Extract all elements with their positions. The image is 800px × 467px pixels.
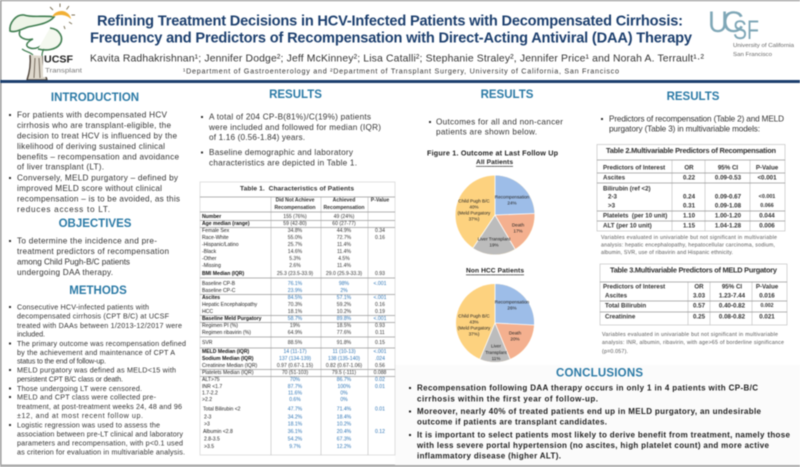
table 1: 49 (24%) (334, 214, 355, 220)
table 1: Did Not Achieve (276, 198, 315, 204)
chart: non HCC patients pie: 20% (510, 336, 520, 342)
table 1: 89.8% (337, 316, 352, 322)
heading: results: RESULTS (269, 89, 322, 101)
text block: cohort summary (201, 112, 381, 168)
logo: UCSF Transplant: UCSF (44, 54, 74, 66)
text block: methods: by the achievement and maintenance of CPT A (17, 348, 175, 357)
table 2: 0.09-1.08 (715, 202, 742, 210)
title: Frequency and Predictors of Recompensation with Direct-Acting Antiviral (DAA) Therapy (90, 30, 693, 46)
text block: methods: status to the end of follow-up. (17, 356, 106, 366)
text block: methods: Consecutive HCV-infected patients with (17, 302, 149, 312)
table 1: 5.3% (289, 256, 301, 262)
table 2: Ascites (603, 174, 626, 182)
text block: introduction: Conversely, MELD purgatory – defined by (17, 174, 179, 182)
table 2: ALT (per 10 unit) (603, 222, 652, 230)
table 3: 0.40-0.82 (719, 302, 746, 310)
table 3: OR (694, 284, 704, 290)
table 3: 0.25 (693, 314, 706, 320)
table 1: 34.2% (288, 414, 303, 420)
table 1: 55.0% (288, 235, 303, 241)
table 1: 59 (42-80) (283, 221, 307, 227)
table 1: 70 (51-103) (282, 370, 308, 376)
table 1: SVR (202, 340, 213, 346)
table 1: 18.5% (337, 323, 352, 329)
table 2: 0.09-0.67 (715, 194, 742, 200)
table 1: 155 (76%) (283, 214, 307, 220)
table 1: 72.7% (337, 235, 352, 241)
table 1: Number (202, 214, 221, 220)
table 1: -Black (202, 249, 217, 255)
table 1: 0.16 (375, 235, 385, 241)
authors: Kavita Radhakrishnan¹; Jennifer Dodge²; Jeff McKinney²; Lisa Catalli²; Stephanie Straley², Jennifer Price¹ and Norah A. Terrault¹·² (90, 54, 705, 64)
table 3: 0.08-0.82 (719, 314, 746, 320)
text block: cohort summary: A total of 204 CP-B(81%)/C(19%) patients (209, 112, 371, 122)
table 1: 2.8-3.5 (204, 436, 220, 442)
table 1: 84.5% (288, 295, 303, 301)
table 1: 14 (11-17) (283, 349, 307, 355)
text block: introduction: reduces access to LT. (17, 205, 110, 214)
table 1: <.001 (374, 295, 387, 301)
table 1: <.001 (374, 281, 387, 287)
chart: non HCC patients pie (456, 284, 534, 362)
table 1: 36.1% (288, 429, 303, 435)
table 1: 0.6% (289, 397, 301, 403)
table 1: 0% (340, 397, 348, 403)
text block: conclusions (409, 384, 791, 460)
table 3: Total Bilirubin (605, 302, 646, 310)
text block: methods: ±12, and at most recent follow up. (17, 411, 143, 420)
logo: UCSF: University of California (733, 43, 795, 49)
chart: all patients pie: 24% (507, 200, 517, 206)
logo: UCSF: U (708, 6, 728, 39)
chart: non HCC patients pie: Recompensation (495, 300, 530, 304)
table 2: 0.044 (759, 212, 775, 220)
table 1: 71.4% (337, 406, 352, 412)
table 1: 11 (10-13) (332, 349, 356, 355)
table 1: 0.16 (375, 302, 385, 308)
table 2: P-Value (756, 164, 779, 172)
table 1: 0.93 (375, 271, 385, 277)
table 2: 0.09-0.53 (715, 174, 742, 182)
text block: methods: persistent CPT B/C class or death. (17, 374, 123, 384)
text block: methods: MELD and CPT class were collected pre- (17, 392, 157, 402)
table 3: 3.03 (693, 292, 706, 300)
text block: introduction: improved MELD score without clinical (17, 184, 162, 193)
table 2: 1.00-1.20 (715, 212, 742, 220)
text block: methods: The primary outcome was recompensation defined (17, 339, 186, 348)
figure title: Figure 1. Outcome at Last Follow Up (427, 148, 559, 158)
note: table 2: Variables evaluated in univariable but not significant in multivariable (601, 235, 777, 241)
heading: results: RESULTS (481, 89, 534, 101)
table 1: 0.56 (375, 363, 385, 369)
table 1: 54.2% (288, 436, 303, 442)
table 3: 0.57 (693, 302, 706, 310)
table 1: 67.3% (337, 436, 352, 442)
table 1: 2-3 (204, 414, 212, 420)
note: table 2 (601, 235, 777, 256)
chart: non HCC patients pie: Transplant (485, 350, 507, 355)
table 2: <0.001 (759, 194, 775, 200)
table 2: Predictors of Interest (603, 164, 665, 172)
text block: conclusions: inflammatory disease (higher ALT). (417, 452, 561, 460)
heading: conclusions: CONCLUSIONS (556, 368, 643, 380)
text block: introduction: benefits – recompensation and avoidance (17, 152, 179, 162)
table 2: Table 2.Multivariable Predictors of Recompensation (606, 146, 776, 155)
table 1: 138 (135-140) (328, 356, 360, 362)
text block: cohort summary: Baseline demographic and laboratory (209, 148, 354, 157)
chart: all patients pie (456, 176, 534, 255)
note: table 3: (p=0.057). (602, 349, 628, 355)
table 1: .024 (375, 356, 385, 362)
table 1: 10.2% (337, 422, 352, 428)
table 1: <.001 (374, 349, 387, 355)
table 1: Age median (range) (202, 221, 250, 227)
table 1: 11.4% (337, 249, 351, 255)
table 1: Recompensation (323, 205, 365, 211)
text block: methods: as criterion for evaluation in multivariable analysis. (17, 448, 185, 456)
table 1: Baseline CP-C (202, 288, 236, 294)
chart: non HCC patients pie: Child Pugh B/C (458, 314, 490, 318)
panel: results column 2 (200, 89, 395, 455)
heading: objectives: OBJECTIVES (59, 218, 132, 230)
chart: all patients pie: 40% (469, 204, 479, 210)
text block: introduction: cirrhosis who are transplant-eligible, the (17, 121, 171, 130)
chart: all patients pie: (Meld Purgatory (458, 210, 491, 216)
table 1: HCC (202, 309, 213, 315)
figure title (427, 148, 559, 166)
table 2: Bilirubin (ref <2) (603, 186, 651, 192)
table 3: Ascites (605, 292, 628, 300)
text block: cohort summary: of 1.16 (0.56-1.84) years. (209, 133, 305, 142)
text block: introduction: recompensation – is to be avoided, as this (17, 194, 180, 204)
note: table 2: albumin, SVR, use of ribavirin and Hispanic ethnicity. (601, 250, 733, 256)
table 2: >3 (608, 202, 616, 210)
table 1: Recompensation (274, 205, 316, 211)
table 1: 23.9% (288, 288, 303, 294)
table 2: 95% CI (718, 164, 738, 172)
table 1: 98% (339, 281, 350, 287)
text block: methods: treated with DAAs between 1/2013-12/2017 were (17, 321, 182, 330)
table 1: 18.1% (288, 422, 303, 428)
text block: introduction: of liver transplant (LT). (17, 162, 104, 172)
table 3: Table 3.Multivariable Predictors of MELD Purgatory (610, 266, 778, 274)
text block: methods: Logistic regression was used to assess the (17, 420, 160, 430)
table 2: 1.10 (683, 212, 696, 220)
table 3: Predictors of Interest (603, 284, 665, 290)
table 1: Baseline Meld Purgatory (202, 316, 262, 322)
table 1: 25.7% (288, 242, 303, 248)
text block: outcomes (429, 118, 563, 136)
table 2: OR (684, 164, 694, 172)
text block: objectives: To determine the incidence and pre- (17, 236, 157, 246)
table 3: Creatinine (605, 314, 636, 320)
table 2: 0.22 (683, 174, 696, 182)
table 1: 79.5 (-111) (332, 370, 356, 376)
table 1: 76.1% (288, 281, 303, 287)
table 1: Total Bilirubin <2 (203, 406, 241, 412)
text block: conclusions: with less severe portal hypertension (no ascites, high platelet count) and more active (416, 441, 770, 450)
table 1: 11.4% (337, 263, 351, 269)
text block: objectives: treatment predictors of recompensation (17, 247, 169, 256)
chart: all patients pie: 37%) (469, 216, 480, 222)
note: table 3: Variables evaluated in univariable but not significant in multivariable (602, 332, 778, 338)
logo: UCSF: F (747, 15, 759, 45)
table 1: 64.9% (288, 330, 303, 336)
table 1: Creatinine Median (IQR) (202, 363, 258, 369)
table 1: 91.8% (337, 340, 352, 346)
table 1: 0.01 (375, 384, 385, 390)
affiliations: ¹Department of Gastroenterology and ²Department of Transplant Surgery, University of California, San Francisco (183, 66, 619, 76)
table 2: <0.001 (757, 174, 777, 182)
table 1: Race-White (202, 235, 229, 241)
text block: methods: MELD purgatory was defined as MELD<15 with (17, 366, 176, 374)
table 1: >3.5 (204, 444, 214, 450)
table 1: 70% (290, 377, 301, 383)
heading: results: RESULTS (667, 91, 720, 103)
chart: non HCC patients pie: 37%) (469, 332, 480, 336)
table 2: 2-3 (608, 194, 618, 200)
table 1: INR <1.7 (202, 384, 222, 390)
table 1: 60 (27-77) (332, 221, 356, 227)
chart: non HCC patients pie: (Meld Purgatory (458, 326, 491, 330)
chart: non HCC patients pie: 26% (507, 306, 517, 310)
table 1: 2% (340, 288, 348, 294)
table 1: 0.11 (375, 330, 385, 336)
text block: outcomes: Outcomes for all and non-cancer (436, 118, 563, 126)
panel: left column (9, 92, 186, 456)
table 1: >2.2 (202, 397, 212, 403)
chart: all patients pie: Recompensation (495, 194, 530, 200)
table 1: 9.7% (289, 444, 301, 450)
text block: introduction: decision to treat HCV is influenced by the (17, 132, 177, 140)
note: table 3 (602, 332, 784, 355)
table 1: Female Sex (202, 228, 230, 234)
panel: conclusions (409, 368, 791, 460)
title (90, 14, 693, 46)
table 1: 19% (290, 323, 301, 329)
text block: methods: parameters and recompensation, with p<0.1 used (17, 438, 183, 448)
table 3: 95% CI (722, 284, 742, 290)
title: Refining Treatment Decisions in HCV-Infected Patients with Decompensated Cirrhosis: (97, 14, 683, 30)
table 1: ALT>75 (202, 377, 220, 383)
heading: methods: METHODS (69, 285, 127, 297)
text block: methods: decompensated cirrhosis (CPT B/C) at UCSF (17, 312, 170, 320)
logo: UCSF Transplant (10, 4, 82, 80)
table 1: 11.6% (288, 390, 302, 396)
text block: introduction: likelihood of deriving sustained clinical (17, 142, 165, 151)
table 2: 1.04-1.28 (715, 222, 742, 230)
table 1: 57.1% (337, 295, 352, 301)
text block: objectives (9, 236, 169, 277)
table 1: Regimen PI (%) (202, 323, 238, 329)
table 3: 0.016 (759, 292, 775, 300)
note: table 2: analysis: hepatic encephalopathy, hepatocellular carcinoma, sodium, (601, 242, 775, 248)
table 1: 47.7% (288, 406, 303, 412)
table 1: 1.7-2.2 (202, 390, 218, 396)
table 2: Platelets (per 10 unit) (603, 212, 667, 220)
table 1: 137 (134-139) (279, 356, 311, 362)
panel: results column 4 (597, 91, 787, 355)
table 1: 0.01 (375, 406, 385, 412)
text block: methods: Those undergoing LT were censored. (17, 384, 142, 393)
text block: introduction (9, 110, 180, 214)
text block: objectives: undergoing DAA therapy. (17, 268, 113, 277)
text block: cohort summary: were included and followed for median (IQR) (208, 123, 381, 132)
table 1: 4.5% (338, 256, 350, 262)
table 2: 0.066 (760, 203, 774, 209)
table 1: 0.15 (375, 340, 385, 346)
table 3: 0.002 (761, 303, 774, 309)
table 1: Platelets Median (IQR) (202, 370, 254, 376)
table 1: 12.2% (337, 444, 352, 450)
chart: all patients pie: 19% (489, 242, 499, 248)
text block: conclusions: outcome if patients are transplant candidates. (417, 418, 607, 426)
table 3: 0.021 (759, 314, 775, 320)
text block: conclusions: Moreover, nearly 40% of treated patients end up in MELD purgatory, an undesirable (417, 407, 762, 416)
table 2 (597, 144, 785, 231)
table 1: 70.3% (288, 302, 303, 308)
table 1: Baseline CP-B (202, 281, 236, 287)
table 1: 25.3 (23.5-33.9) (277, 271, 313, 277)
table 1: 2.6% (289, 263, 301, 269)
chart: non HCC patients pie: Liver (491, 344, 501, 348)
table 1: P-Value (371, 198, 389, 204)
table 1: Regimen ribavirin (%) (202, 330, 251, 336)
table 1: 0.02 (375, 377, 385, 383)
text block: methods (9, 302, 186, 456)
text block: introduction: For patients with decompensated HCV (17, 110, 168, 120)
chart: all patients pie: 17% (513, 228, 523, 234)
table 1: 100% (337, 384, 351, 390)
text block: predictors: purgatory (Table 3) in multivariable models: (609, 124, 760, 134)
table 1: 0.34 (375, 228, 385, 234)
text block: conclusions: Recompensation following DAA therapy occurs in only 1 in 4 patients with CP-B/C (417, 384, 758, 392)
chart: non HCC patients pie: Death (509, 330, 522, 336)
table 1: 0.088 (374, 370, 387, 376)
text block: conclusions: cirrhosis within the first year of follow-up. (417, 394, 598, 404)
header divider (0, 80, 800, 83)
table 1: MELD Median (IQR) (202, 349, 250, 355)
table 3: 1.23-7.44 (719, 292, 746, 300)
logo: UCSF: S (733, 15, 747, 45)
text block: cohort summary: characteristics are depicted in Table 1. (209, 158, 357, 168)
table 1: 88.5% (288, 340, 303, 346)
table 1: 34.8% (288, 228, 303, 234)
table 1: BMI Median (IQR) (202, 271, 244, 277)
table 1: 0% (340, 390, 348, 396)
table 1: -Other (202, 256, 217, 262)
table 1: 18.4% (337, 414, 352, 420)
heading: introduction: INTRODUCTION (51, 92, 139, 104)
text block: conclusions: It is important to select patients most likely to derive benefit from treatment, namely those (417, 430, 791, 440)
logo: UCSF: San Francisco (733, 52, 772, 58)
table 1: -Missing (202, 263, 221, 269)
table 1: 14.6% (288, 249, 303, 255)
table 1: 58.7% (288, 316, 303, 322)
table 1: 0.93 (375, 323, 385, 329)
panel: results column 3 (427, 89, 563, 362)
table 1: 0.19 (375, 309, 385, 315)
logo: UCSF (708, 6, 795, 58)
figure subtitle: Non HCC Patients (466, 268, 524, 274)
table 1: 20.4% (337, 429, 352, 435)
table 1: 0.12 (375, 429, 385, 435)
chart: all patients pie: Child Pugh B/C (458, 198, 490, 204)
table 1: Hepatic Encephalopathy (202, 302, 258, 308)
table 1: 11.4% (337, 242, 351, 248)
table 1: Table 1. Characteristics of Patients (240, 186, 354, 192)
text block: methods: association between pre-LT clinical and laboratory (17, 430, 183, 438)
table 1: 44.9% (337, 228, 352, 234)
table 1: 77.6% (337, 330, 352, 336)
table 2: 0.006 (759, 222, 775, 230)
chart: non HCC patients pie: 43% (469, 320, 479, 324)
chart: non HCC patients pie: 11% (492, 356, 500, 361)
table 1: Ascites (202, 295, 220, 301)
table 1: 29.0 (25.9-33.3) (326, 271, 362, 277)
table 3: P-Value (756, 284, 779, 290)
table 1: 86.7% (337, 377, 352, 383)
table 1: >3 (204, 422, 210, 428)
table 1: -Hispanic/Latino (202, 242, 239, 248)
table 1: 10.2% (337, 309, 352, 315)
text block: objectives: among Child Pugh-B/C patients (17, 258, 130, 266)
table 3 (600, 264, 787, 325)
table 2: 0.31 (683, 202, 696, 210)
table 1: 18.1% (288, 309, 303, 315)
text block: methods: included. (17, 330, 45, 338)
chart: all patients pie: Liver Transplant (478, 236, 511, 242)
logo: UCSF Transplant: Transplant (45, 68, 82, 74)
table 2: 0.24 (683, 194, 696, 200)
table 1: 0.97 (0.67-1.15) (277, 363, 313, 369)
logo: UCSF: C (722, 6, 744, 39)
text block: predictors (601, 114, 784, 134)
figure title: All Patients (476, 159, 513, 166)
table 1: <.001 (374, 316, 387, 322)
table 1: Achieved (333, 198, 355, 204)
table 2: 1.15 (683, 222, 696, 230)
table 1: Sodium Median (IQR) (202, 356, 254, 362)
text block: outcomes: patients are shown below. (436, 128, 537, 136)
text block: methods: treatment, at post-treatment weeks 24, 48 and 96 (17, 402, 182, 411)
table 1 (200, 182, 395, 455)
table 1: 59.2% (337, 302, 352, 308)
chart: all patients pie: Death (512, 222, 525, 228)
table 1: 0.82 (0.67-1.06) (326, 363, 362, 369)
table 1: 87.7% (288, 384, 303, 390)
note: table 3: analysis: INR, albumin, ribavirin, with age>65 of borderline significance (602, 340, 784, 346)
table 1: Albumin <2.8 (203, 429, 233, 435)
text block: predictors: Predictors of recompensation (Table 2) and MELD (609, 114, 784, 124)
